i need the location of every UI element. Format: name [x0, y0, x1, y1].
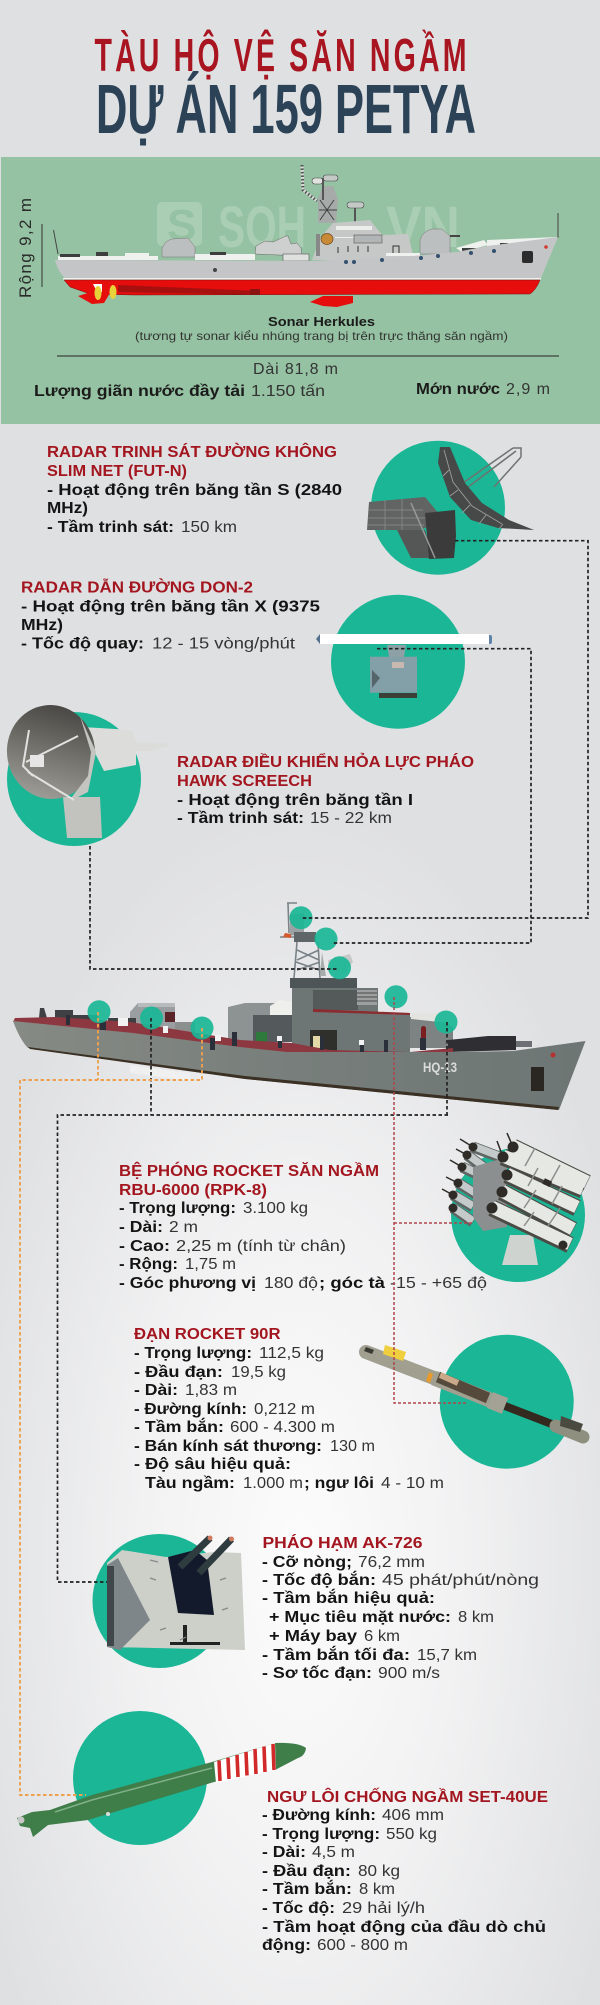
panel: RBU-6000 text: - Góc phương vị: [119, 1275, 256, 1292]
connector: RBU launcher and rocket: [394, 997, 474, 1403]
panel: RBU-6000 text: RBU-6000 (RPK-8): [119, 1182, 267, 1199]
panel: 90R rocket text: ĐẠN ROCKET 90R: [134, 1326, 280, 1343]
grey hull: [55, 237, 558, 278]
mast: [302, 165, 364, 223]
panel: Don-2 radar text: MHz): [21, 617, 63, 634]
panel: 90R rocket text: ; ngư lôi: [304, 1475, 374, 1492]
title: [94, 28, 476, 148]
panel: SET-40UE text: - Đường kính:: [262, 1807, 376, 1824]
panel: Hawk Screech text: - Hoạt động trên băng tần I: [177, 792, 413, 809]
panel: Slim Net radar text: 150 km: [181, 519, 237, 536]
panel: SET-40UE text: - Tốc độ:: [262, 1900, 335, 1917]
icon: Hawk Screech radar: [1, 699, 170, 846]
panel: Slim Net radar text: - Tầm trinh sát:: [47, 519, 174, 536]
superstructure: [312, 220, 413, 260]
ship photo: [13, 903, 586, 1110]
panel: SET-40UE text: - Đầu đạn:: [262, 1863, 351, 1880]
sonar label: [135, 314, 508, 343]
panel: 90R rocket text: 0,212 m: [254, 1401, 315, 1418]
panel: SET-40UE text: 550 kg: [386, 1826, 437, 1843]
displacement: [34, 383, 325, 400]
panel: Don-2 radar text: - Tốc độ quay:: [21, 636, 144, 653]
panel: 90R rocket text: 1.000 m: [243, 1475, 303, 1492]
panel: Don-2 radar text: - Hoạt động trên băng tần X (9375: [21, 599, 320, 616]
panel: ship side profile and dimensions: [1, 157, 600, 424]
icon: SET-40UE torpedo: [17, 1711, 306, 1845]
panel: AK-726 text: 8 km: [458, 1609, 494, 1626]
draught: Mớn nước: [416, 381, 500, 398]
gun turret rear: [162, 238, 195, 257]
panel: 90R rocket text: - Đường kính:: [134, 1401, 247, 1418]
panel: RBU-6000 text: - Cao:: [119, 1238, 170, 1255]
watermark: [157, 195, 460, 260]
crew white shirts: [118, 1018, 364, 1045]
anchor hawse: [531, 1067, 544, 1091]
sonar label: (tương tự sonar kiểu nhúng trang bị trên trực thăng săn ngầm): [135, 329, 508, 343]
panel: RBU-6000 text: -15 - +65 độ: [390, 1275, 487, 1292]
sonar label: Sonar Herkules: [268, 314, 375, 329]
deck equipment: [39, 1008, 136, 1028]
panel: AK-726 text: 15,7 km: [417, 1647, 477, 1664]
forward superstructure: [228, 1003, 275, 1043]
connector: torpedo tubes to torpedo: [20, 1012, 202, 1795]
panel: SET-40UE text: 80 kg: [358, 1863, 400, 1880]
panel: Hawk Screech text: HAWK SCREECH: [177, 773, 312, 790]
panel: SET-40UE text: 4,5 m: [312, 1844, 355, 1861]
panel: 90R rocket text: 4 - 10 m: [381, 1475, 444, 1492]
watermark: VN: [386, 195, 460, 260]
panel: RBU-6000 text: BỆ PHÓNG ROCKET SĂN NGẦM: [119, 1162, 379, 1180]
panel: RBU-6000 text: - Rộng:: [119, 1256, 178, 1273]
deck gear: [58, 237, 558, 260]
panel: RBU-6000 text: [119, 1162, 487, 1292]
bridge block photo: [292, 988, 410, 1052]
panel: 90R rocket text: 1,83 m: [185, 1382, 237, 1399]
hull number: HQ-13: [423, 1059, 457, 1075]
deck: [13, 1017, 453, 1053]
panel: SET-40UE text: - Trọng lượng:: [262, 1826, 380, 1843]
mast photo: [280, 903, 353, 978]
rear gun turret photo: [130, 1003, 175, 1030]
launcher housing: [255, 236, 302, 256]
panel: 90R rocket text: 112,5 kg: [259, 1345, 324, 1362]
panel: 90R rocket text: - Tầm bắn:: [134, 1418, 224, 1436]
icon: AK-726 gun: [92, 1534, 245, 1668]
title: TÀU HỘ VỆ SĂN NGẦM: [94, 28, 467, 82]
panel: AK-726 text: - Cỡ nòng;: [262, 1554, 352, 1571]
connector: Hawk Screech to mast: [90, 846, 337, 969]
panel: SET-40UE text: - Tầm bắn:: [262, 1880, 352, 1898]
panel: AK-726 text: PHÁO HẠM AK-726: [262, 1535, 423, 1552]
panel: Don-2 radar text: 12 - 15 vòng/phút: [152, 636, 296, 653]
length label: Dài 81,8 m: [253, 361, 338, 378]
panel: AK-726 text: 900 m/s: [378, 1665, 440, 1682]
panel: 90R rocket text: Tàu ngầm:: [145, 1475, 235, 1492]
launcher tube caps: [442, 1133, 567, 1249]
panel: Don-2 radar text: RADAR DẪN ĐƯỜNG DON-2: [21, 579, 253, 597]
panel: AK-726 text: + Máy bay: [269, 1628, 357, 1645]
panel: AK-726 text: - Sơ tốc đạn:: [262, 1665, 372, 1682]
connector: Don-2 to mast: [333, 649, 531, 943]
panel: Hawk Screech text: - Tầm trinh sát:: [177, 810, 304, 827]
displacement: 1.150 tấn: [251, 383, 325, 400]
rear launcher tubes: [453, 1146, 502, 1222]
hull reflection: [130, 1065, 190, 1081]
panel: SET-40UE text: 600 - 800 m: [317, 1937, 408, 1954]
panel: Hawk Screech text: RADAR ĐIỀU KHIỂN HỎA LỰC PHÁO: [177, 753, 474, 771]
panel: AK-726 text: 6 km: [364, 1628, 400, 1645]
red star: [550, 1052, 556, 1058]
panel: AK-726 text: 45 phát/phút/nòng: [382, 1572, 539, 1589]
panel: Slim Net radar text: - Hoạt động trên băng tần S (2840: [47, 482, 342, 499]
panel: 90R rocket text: [134, 1326, 444, 1492]
panel: 90R rocket text: - Độ sâu hiệu quả:: [134, 1456, 291, 1473]
length line: [57, 355, 559, 357]
panel: SET-40UE text: 29 hải lý/h: [342, 1900, 425, 1917]
panel: 90R rocket text: - Bán kính sát thương:: [134, 1438, 322, 1455]
panel: AK-726 text: + Mục tiêu mặt nước:: [269, 1609, 451, 1626]
icon: Don-2 radar: [316, 595, 492, 729]
panel: RBU-6000 text: 180 độ: [264, 1275, 318, 1292]
portholes and anchor: [213, 245, 548, 272]
icon: 90R rocket: [364, 1335, 583, 1469]
panel: SET-40UE text: 406 mm: [382, 1807, 444, 1824]
panel: 90R rocket text: - Trọng lượng:: [134, 1345, 252, 1362]
panel: Don-2 radar text: [21, 579, 320, 653]
panel: 90R rocket text: - Dài:: [134, 1382, 178, 1399]
draught: [416, 381, 550, 398]
panel: Slim Net radar text: RADAR TRINH SÁT ĐƯỜNG KHÔNG: [47, 443, 337, 461]
icon: RBU-6000 launcher: [442, 1133, 587, 1282]
panel: RBU-6000 text: - Dài:: [119, 1219, 163, 1236]
panel: 90R rocket text: 130 m: [330, 1438, 375, 1455]
aft structure: [410, 1017, 453, 1048]
red underwater hull: [64, 280, 540, 295]
rudder and propellers: [78, 283, 260, 304]
icon: Slim Net radar: [367, 441, 534, 575]
watermark: SOH: [218, 195, 306, 260]
panel: AK-726 text: 76,2 mm: [358, 1554, 425, 1571]
gun turret front: [420, 229, 450, 254]
panel: RBU-6000 text: ; góc tà: [319, 1275, 385, 1292]
marker dots on ship: [88, 906, 458, 1040]
panel: 90R rocket text: - Đầu đạn:: [134, 1364, 223, 1381]
panel: Hawk Screech text: [177, 753, 474, 827]
panel: SET-40UE text: - Tầm hoạt động của đầu dò chủ: [262, 1919, 546, 1936]
panel: RBU-6000 text: 2 m: [169, 1219, 198, 1236]
panel: AK-726 text: [262, 1535, 539, 1682]
panel: SET-40UE text: động:: [262, 1937, 311, 1954]
crew: [66, 1015, 426, 1052]
panel: Slim Net radar text: MHz): [47, 500, 88, 517]
bridge top deck: [290, 978, 357, 988]
panel: RBU-6000 text: 3.100 kg: [243, 1200, 308, 1217]
panel: SET-40UE text: NGƯ LÔI CHỐNG NGẦM SET-40UE: [267, 1788, 548, 1806]
panel: 90R rocket text: 600 - 4.300 m: [230, 1419, 335, 1436]
connector: Slim Net to mast: [302, 541, 588, 918]
panel: RBU-6000 text: 1,75 m: [185, 1256, 236, 1273]
panel: 90R rocket text: 19,5 kg: [231, 1364, 286, 1381]
panel: SET-40UE text: 8 km: [359, 1881, 395, 1898]
panel: AK-726 text: - Tốc độ bắn:: [262, 1571, 376, 1589]
connector: guns to AK-726: [58, 1018, 448, 1582]
panel: RBU-6000 text: - Trọng lượng:: [119, 1200, 236, 1217]
panel: AK-726 text: - Tầm bắn tối đa:: [262, 1646, 410, 1664]
front launcher tubes: [492, 1146, 587, 1245]
panel: AK-726 text: - Tầm bắn hiệu quả:: [262, 1589, 435, 1607]
watermark: S: [167, 201, 196, 250]
panel: SET-40UE text: - Dài:: [262, 1844, 306, 1861]
displacement: Lượng giãn nước đầy tải: [34, 383, 245, 400]
width dimension: Rộng 9,2 m: [16, 198, 35, 298]
panel: Slim Net radar text: [47, 443, 342, 536]
panel: Slim Net radar text: SLIM NET (FUT-N): [47, 463, 187, 480]
panel: RBU-6000 text: 2,25 m (tính từ chân): [176, 1238, 346, 1255]
sonar dome: [310, 296, 353, 307]
grey hull photo: [13, 1021, 586, 1110]
ship side drawing: [54, 165, 558, 307]
draught: 2,9 m: [506, 381, 550, 398]
panel: SET-40UE text: [262, 1788, 548, 1954]
panel: Hawk Screech text: 15 - 22 km: [310, 810, 392, 827]
